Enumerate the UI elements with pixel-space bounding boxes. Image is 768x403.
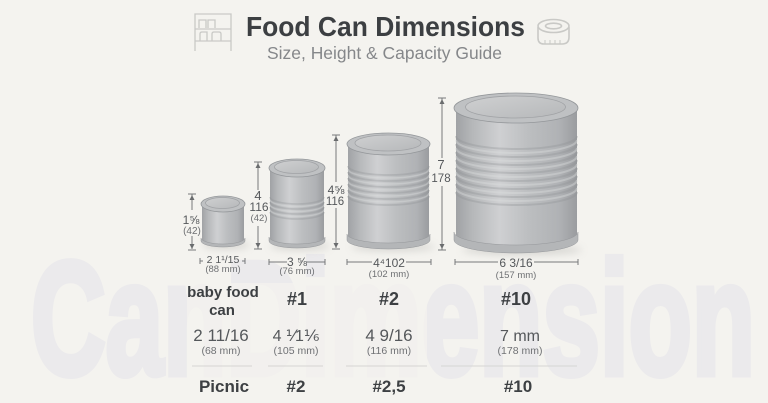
- table row: alternate names: #10: [504, 377, 532, 396]
- table row: can names: can: [209, 302, 235, 319]
- can: number 10: [454, 93, 582, 255]
- table row: heights: (68 mm): [201, 345, 241, 357]
- width dimension: number 1: (76 mm): [279, 266, 315, 277]
- height dimension: number 10: 7: [437, 157, 445, 172]
- width dimension: number 1: [269, 255, 325, 277]
- height dimension: number 1: 116: [249, 200, 269, 214]
- table row: heights: 2 11/16: [193, 326, 249, 345]
- table row: alternate names: #2,5: [372, 377, 406, 396]
- width dimension: number 10: (157 mm): [496, 270, 536, 281]
- width dimension: number 10: 6 3/16: [499, 256, 533, 270]
- table row: can names: #10: [501, 289, 531, 309]
- height dimension: baby food: 1⅝: [183, 213, 200, 227]
- width dimension: number 2: (102 mm): [369, 269, 409, 280]
- width dimension: number 2: 4⁴102: [373, 256, 405, 270]
- table row: heights: 4 9/16: [365, 326, 413, 345]
- can: baby food: [201, 196, 250, 249]
- height dimension: number 2: 116: [326, 196, 344, 208]
- table row: alternate names: [199, 377, 532, 396]
- table row: heights: (178 mm): [498, 345, 542, 357]
- height dimension: number 2: 4⅝: [328, 183, 345, 197]
- table row: heights: 4 ⅟1⅙: [273, 328, 319, 345]
- table row: can names: baby food: [187, 284, 259, 301]
- height dimension: number 10: [431, 98, 451, 250]
- height dimension: number 1: (42): [251, 213, 267, 224]
- subtitle: Size, Height & Capacity Guide: [267, 43, 502, 63]
- height dimension: number 2: [326, 135, 345, 249]
- can: number 1: [269, 159, 330, 250]
- width dimension: number 1: 3 ⅝: [287, 255, 308, 269]
- table row: heights: (105 mm): [274, 345, 318, 357]
- icon: tape measure: [538, 20, 569, 44]
- height dimension: baby food: (42): [183, 226, 201, 237]
- table row: alternate names: Picnic: [199, 377, 249, 396]
- table row: heights: [193, 326, 542, 357]
- table row: heights: (116 mm): [367, 345, 411, 357]
- height dimension: baby food: [183, 194, 201, 250]
- width dimension: baby food: (88 mm): [205, 264, 241, 275]
- width dimension: number 2: [347, 256, 431, 280]
- width dimension: number 10: [455, 256, 578, 281]
- height dimension: number 1: [249, 162, 269, 249]
- height dimension: number 10: 178: [431, 173, 451, 185]
- table row: can names: [187, 284, 531, 319]
- title: Food Can Dimensions: [246, 11, 525, 42]
- width dimension: baby food: [200, 254, 245, 275]
- table row: heights: 7 mm: [500, 328, 540, 345]
- width dimension: baby food: 2 1¹/15: [207, 254, 239, 266]
- height dimension: number 1: 4: [254, 188, 262, 203]
- table row: can names: #2: [379, 289, 399, 309]
- can: number 2: [347, 133, 435, 251]
- table row: alternate names: #2: [287, 377, 305, 396]
- table row: can names: #1: [287, 289, 307, 309]
- icon: pantry shelf: [195, 14, 231, 51]
